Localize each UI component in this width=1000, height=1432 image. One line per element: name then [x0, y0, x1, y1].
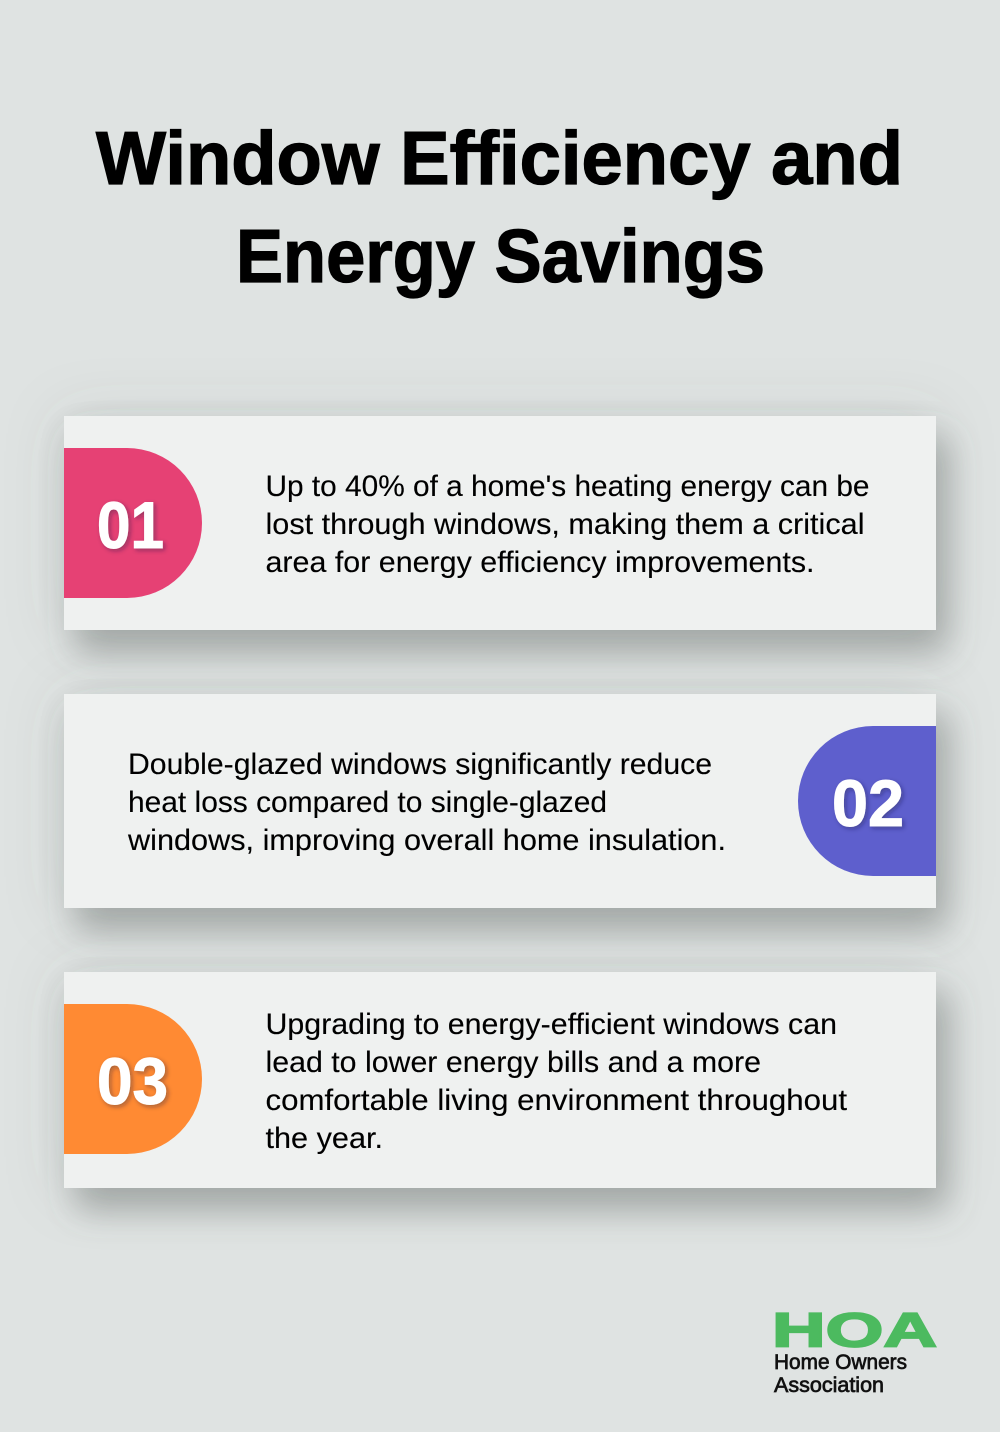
title: [96, 116, 903, 298]
text: card 02 body: [127, 748, 726, 857]
text: card 03 body: Upgrading to energy-efficient windows can: [266, 1008, 837, 1041]
badge: 02: 02: [832, 766, 904, 840]
badge: 01: 01: [97, 488, 164, 562]
badge: 02: [798, 726, 936, 876]
badge: 01: [64, 448, 202, 598]
text: card 02 body: Double-glazed windows significantly reduce: [128, 748, 712, 781]
badge: 03: 03: [97, 1044, 168, 1118]
text: card 03 body: the year.: [266, 1122, 383, 1155]
text: card 02 body: windows, improving overall home insulation.: [127, 824, 726, 857]
logo: HOA Home Owners Association: HOA: [772, 1304, 937, 1358]
badge: 03: [64, 1004, 202, 1154]
panel: card 01: [64, 416, 936, 630]
text: card 01 body: [266, 470, 870, 579]
text: card 03 body: comfortable living environment throughout: [266, 1084, 848, 1117]
panel: card 02: [64, 694, 936, 908]
title: Energy Savings: [236, 214, 765, 298]
text: card 03 body: lead to lower energy bills and a more: [266, 1046, 761, 1079]
text: card 03 body: [266, 1008, 848, 1155]
text: card 01 body: Up to 40% of a home's heating energy can be: [266, 470, 870, 503]
panel: card 03: [64, 972, 936, 1188]
title: Window Efficiency and: [96, 116, 903, 200]
text: card 02 body: heat loss compared to single-glazed: [128, 786, 607, 819]
logo: HOA Home Owners Association: Home Owners: [774, 1351, 907, 1374]
logo: HOA Home Owners Association: [772, 1304, 937, 1397]
text: card 01 body: lost through windows, making them a critical: [266, 508, 864, 541]
logo: HOA Home Owners Association: Association: [774, 1374, 884, 1397]
text: card 01 body: area for energy efficiency improvements.: [266, 546, 814, 579]
